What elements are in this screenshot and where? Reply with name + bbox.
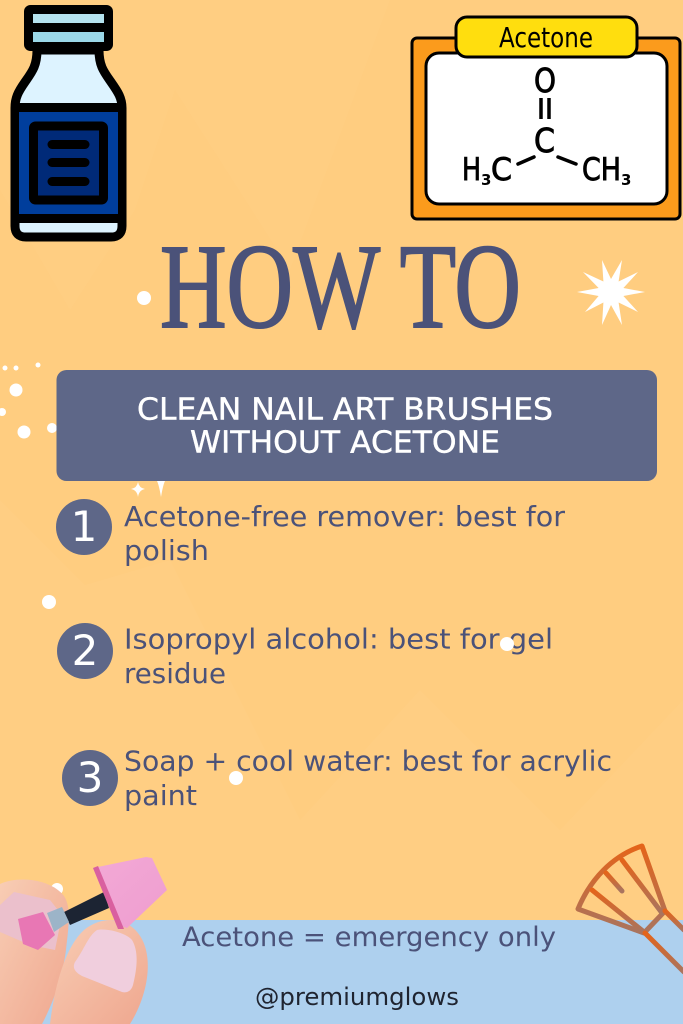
sparkles bbox=[131, 481, 165, 497]
panel: acetone formula card bbox=[412, 17, 680, 219]
title: how to: HOW TO bbox=[160, 220, 521, 354]
footer text: handle: @premiumglows bbox=[255, 983, 459, 1011]
step 1 bbox=[56, 499, 565, 567]
step 2: residue bbox=[124, 657, 226, 690]
step 3 bbox=[62, 744, 612, 812]
step 1: Acetone-free remover: best for bbox=[124, 500, 565, 533]
heading banner bbox=[56, 370, 657, 481]
footer band bbox=[0, 920, 683, 1024]
step 1: 1 bbox=[71, 502, 97, 551]
icon: fingers holding nail brush bbox=[0, 857, 167, 1024]
step 2: Isopropyl alcohol: best for gel bbox=[124, 622, 553, 656]
icon: medicine bottle bbox=[15, 10, 122, 237]
panel: acetone formula card: CH bbox=[582, 152, 621, 188]
icon: orange fan brush bbox=[578, 846, 683, 972]
heading banner: WITHOUT ACETONE bbox=[190, 426, 500, 460]
panel: acetone formula card: O bbox=[534, 61, 556, 100]
panel: acetone formula card: Acetone bbox=[499, 21, 593, 54]
step 2: 2 bbox=[72, 626, 98, 675]
step 1: polish bbox=[124, 534, 209, 567]
step 3: paint bbox=[124, 779, 197, 812]
panel: acetone formula card: 3 bbox=[621, 171, 631, 189]
step 3: Soap + cool water: best for acrylic bbox=[124, 744, 612, 778]
panel: acetone formula card: C bbox=[491, 152, 512, 188]
heading banner: CLEAN NAIL ART BRUSHES bbox=[137, 392, 553, 428]
icon: white starburst bbox=[577, 260, 645, 325]
decorative white dots bbox=[0, 291, 151, 895]
step 3: 3 bbox=[77, 753, 103, 802]
panel: acetone formula card: 3 bbox=[481, 171, 491, 189]
panel: acetone formula card: H bbox=[462, 152, 481, 188]
panel: acetone formula card: C bbox=[534, 121, 555, 160]
footer text: emergency note: Acetone = emergency only bbox=[182, 922, 556, 953]
step 2 bbox=[57, 622, 553, 690]
